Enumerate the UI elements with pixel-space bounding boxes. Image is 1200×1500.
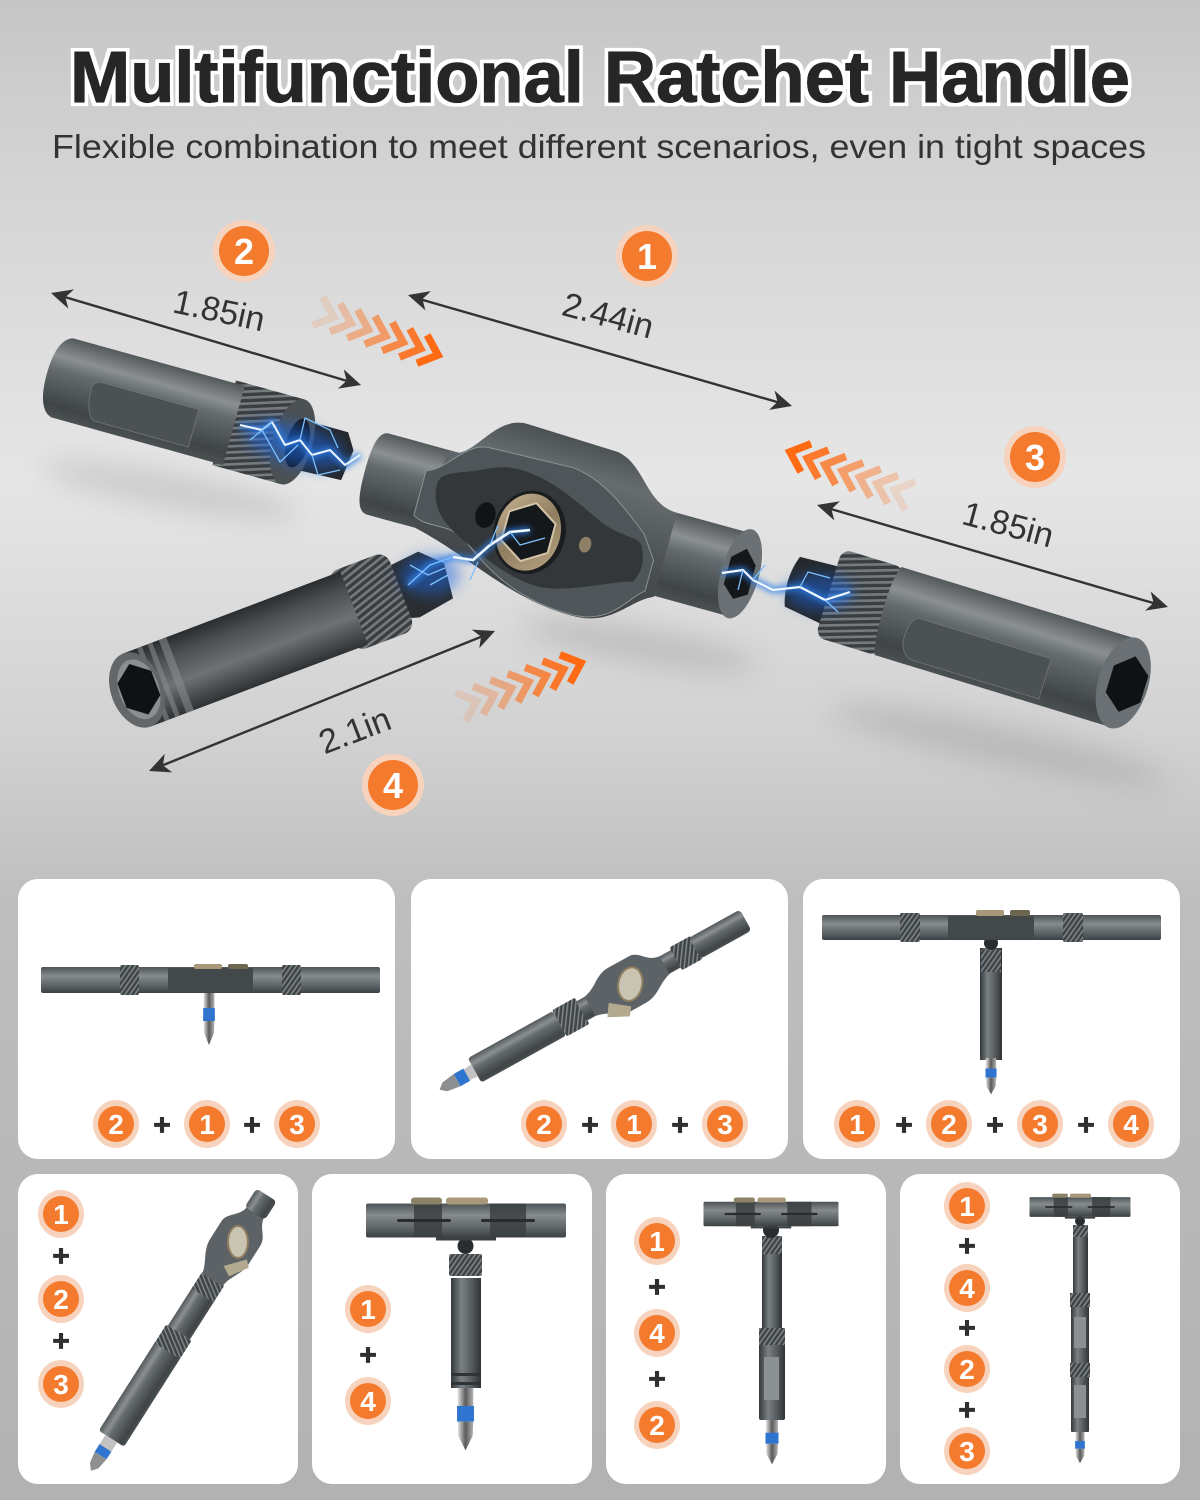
formula: +	[52, 1325, 70, 1358]
formula: 4	[959, 1273, 975, 1304]
formula: 2	[959, 1354, 975, 1385]
chevrons: bottom pointing up right	[456, 649, 586, 721]
badge 3	[1004, 426, 1066, 488]
brass pin	[577, 535, 593, 554]
formula: 3	[959, 1436, 975, 1467]
tool: T with three stems	[1030, 1194, 1130, 1463]
lightning: right	[722, 565, 854, 612]
formula: 3	[289, 1109, 305, 1140]
part 1: ratchet handle	[342, 386, 782, 661]
formula: 1	[199, 1109, 215, 1140]
tool: inline ratchet	[427, 898, 759, 1114]
tool: T with two stems	[704, 1197, 838, 1464]
badge 2: 2	[234, 231, 254, 272]
label: 1.85in left: 1.85in	[170, 283, 268, 339]
formula: 2	[649, 1410, 665, 1441]
panel: combo 1+4	[312, 1174, 592, 1484]
formula: +	[359, 1339, 377, 1372]
handle head	[404, 403, 689, 635]
formula: 4	[649, 1318, 665, 1349]
tool: short T with long stem	[366, 1198, 566, 1450]
part 3: right extension socket	[774, 536, 1161, 735]
formula: +	[986, 1109, 1004, 1142]
formula: 2	[536, 1109, 552, 1140]
arrow: dimension 2	[48, 283, 364, 395]
tool: diagonal ratchet	[71, 1182, 287, 1484]
dark inlay	[418, 449, 658, 612]
formula: +	[958, 1394, 976, 1427]
end face with square hole	[709, 524, 771, 623]
arrow: dimension 4	[145, 622, 499, 780]
panel: combo 2+1+3 horizontal	[18, 879, 395, 1159]
formula	[521, 1100, 748, 1148]
formula: +	[958, 1230, 976, 1263]
label: 1.85in right: 1.85in	[958, 495, 1058, 555]
formula: 1	[626, 1109, 642, 1140]
formula: +	[153, 1109, 171, 1142]
formula	[944, 1182, 990, 1475]
handle left tube	[354, 430, 467, 536]
formula: 4	[1123, 1109, 1139, 1140]
formula: 1	[649, 1226, 665, 1257]
chevrons: right pointing left	[785, 438, 915, 510]
formula	[345, 1285, 391, 1425]
formula: 1	[849, 1109, 865, 1140]
black screw	[472, 500, 499, 530]
panel: combo 1+4+2+3	[900, 1174, 1180, 1484]
badge 4	[362, 754, 424, 816]
badge 4: 4	[383, 765, 403, 806]
part 4: long extension	[98, 533, 462, 738]
panel: combo 1+2+3 vertical	[18, 1174, 298, 1484]
top plate	[400, 430, 672, 632]
formula: +	[1077, 1109, 1095, 1142]
part 2: short extension socket	[35, 331, 363, 500]
label: 2.1in: 2.1in	[314, 700, 396, 762]
formula	[834, 1100, 1154, 1148]
chevrons: top left pointing right	[313, 297, 443, 369]
title: Multifunctional Ratchet Handle	[70, 38, 1130, 118]
formula: 2	[53, 1284, 69, 1315]
badge 3: 3	[1025, 437, 1045, 478]
badge 1: 1	[637, 236, 657, 277]
tool: long T handle	[822, 910, 1161, 1094]
badge 1	[616, 225, 678, 287]
lightning: left	[240, 412, 360, 478]
lightning: center	[400, 525, 545, 595]
formula: 3	[53, 1369, 69, 1400]
formula: +	[648, 1271, 666, 1304]
panel: combo 2+1+3 diagonal	[411, 879, 788, 1159]
formula: 4	[360, 1386, 376, 1417]
socket: brass ring	[484, 482, 575, 582]
panel: combo 1+2+3+4	[803, 879, 1180, 1159]
formula: 3	[1032, 1109, 1048, 1140]
badge 2	[213, 220, 275, 282]
arrow: dimension 1	[405, 285, 795, 416]
formula: +	[243, 1109, 261, 1142]
floor shadows	[40, 454, 1170, 798]
formula: 2	[941, 1109, 957, 1140]
formula: +	[958, 1312, 976, 1345]
formula	[93, 1100, 320, 1148]
tool: T handle with bit	[41, 964, 380, 1045]
formula: 1	[53, 1199, 69, 1230]
formula: 3	[717, 1109, 733, 1140]
panel: combo 1+4+2	[606, 1174, 886, 1484]
subtitle: Flexible combination to meet different scenarios, even in tight spaces	[52, 128, 1146, 165]
formula: +	[648, 1363, 666, 1396]
formula: +	[52, 1240, 70, 1273]
formula: 2	[108, 1109, 124, 1140]
formula: +	[895, 1109, 913, 1142]
formula: 1	[959, 1191, 975, 1222]
formula: +	[581, 1109, 599, 1142]
arrow: dimension 3	[814, 495, 1171, 617]
label: 2.44in: 2.44in	[558, 286, 658, 346]
handle right tube	[627, 505, 751, 616]
formula: 1	[360, 1294, 376, 1325]
formula	[38, 1190, 84, 1408]
formula: +	[671, 1109, 689, 1142]
formula	[634, 1217, 680, 1449]
